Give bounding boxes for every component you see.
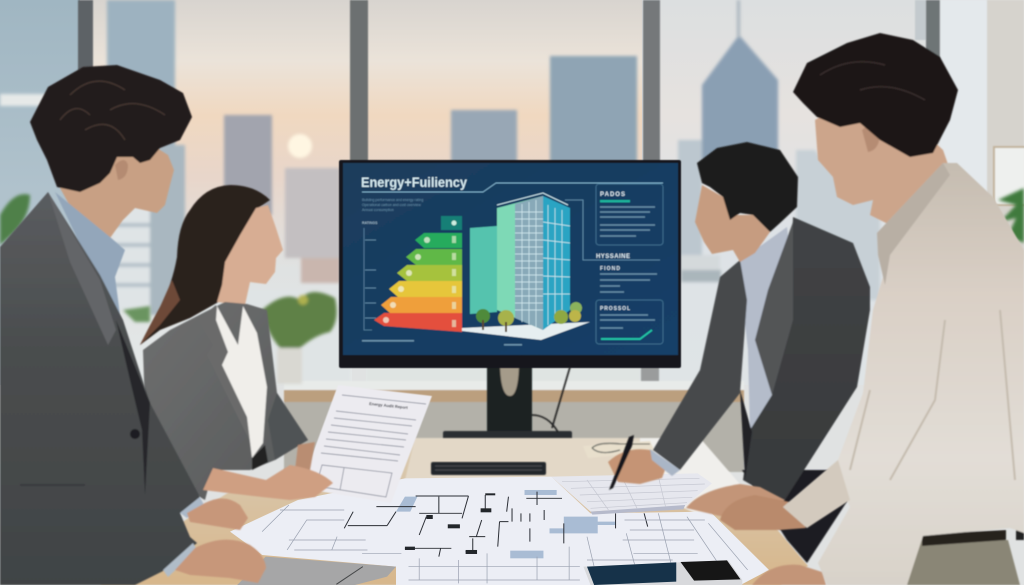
hand lower (175, 540, 266, 583)
panel: bottom right: PROSSOL (600, 306, 630, 312)
screen title: Energy+Fuiliency (361, 175, 468, 190)
energy rating scale (364, 216, 462, 332)
table (100, 438, 808, 585)
ear (862, 124, 880, 152)
neck and face (60, 148, 174, 238)
shirt (783, 163, 1024, 585)
document on table (551, 473, 712, 515)
trousers (742, 470, 850, 563)
arm and hand (295, 442, 315, 470)
held paper: Energy Audit Report (369, 401, 409, 410)
face (217, 205, 283, 305)
laptop (237, 557, 396, 585)
jacket body (743, 217, 870, 503)
panel: top right: PADOS (600, 192, 625, 198)
window frames (78, 0, 1024, 384)
window sill and lower wall (284, 381, 744, 472)
person 2: woman (140, 185, 333, 500)
panel: top right (565, 184, 663, 260)
notebook and glasses (583, 441, 655, 458)
panel: bottom right (596, 300, 663, 344)
person 1: man at left (0, 65, 266, 585)
hair (697, 142, 798, 232)
long hair (140, 185, 270, 345)
neck and face (815, 100, 950, 225)
panel: middle right (596, 254, 657, 292)
intro text: Annual consumption (362, 208, 394, 212)
blouse (216, 306, 267, 458)
intro text: Operational carbon and cost overview (362, 203, 421, 207)
cuffs (180, 497, 204, 518)
jacket arm (653, 260, 747, 470)
face and neck (695, 185, 770, 262)
intro text: Building performance and energy rating (362, 198, 423, 202)
shirt (738, 227, 795, 442)
tablet (583, 560, 742, 585)
person 4: man in cream shirt (686, 33, 1024, 585)
jacket (143, 302, 308, 500)
building illustration (462, 193, 590, 340)
blueprint (230, 477, 769, 585)
intro text (362, 198, 423, 225)
collar and shirt (55, 192, 125, 330)
intro text: RATINGS (362, 221, 378, 225)
hair (793, 33, 958, 157)
person 3: man in dark suit (608, 142, 870, 563)
hair (30, 65, 192, 192)
jacket (0, 192, 200, 585)
title rule (362, 183, 663, 192)
hands (686, 484, 785, 516)
monitor stand and base (443, 362, 572, 452)
monitor (339, 160, 681, 368)
wall board (994, 147, 1024, 205)
panel: middle right: HYSSAINE (596, 254, 630, 260)
hand upper (187, 498, 248, 530)
plants (0, 188, 1024, 384)
keyboard (431, 462, 546, 475)
trousers and belt (905, 540, 1020, 585)
panel: middle right: FIOND (600, 266, 620, 272)
hand and pen (608, 449, 668, 484)
ear (115, 160, 128, 180)
held paper (300, 385, 432, 503)
city skyline through window (0, 0, 880, 385)
